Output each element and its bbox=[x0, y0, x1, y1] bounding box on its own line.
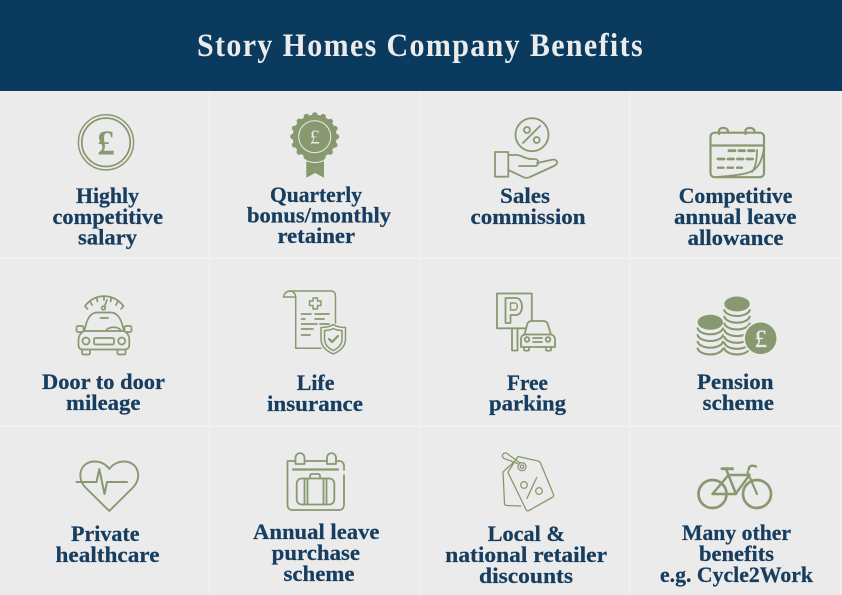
label bbox=[445, 521, 607, 588]
icon: parking sign and car bbox=[497, 294, 555, 351]
label: scheme bbox=[703, 390, 774, 415]
label bbox=[42, 369, 165, 415]
icon: calendar with suitcase bbox=[288, 453, 344, 510]
icon: heart with pulse bbox=[76, 462, 138, 511]
label bbox=[674, 183, 797, 250]
label: bonus/monthly bbox=[247, 202, 391, 228]
title: Story Homes Company Benefits bbox=[197, 28, 644, 64]
panel: door to door mileage bbox=[0, 259, 209, 426]
panel: many other benefits bbox=[630, 427, 840, 595]
label: commission bbox=[470, 204, 586, 229]
label bbox=[52, 183, 163, 250]
label: benefits bbox=[699, 541, 774, 566]
panel: annual leave purchase scheme bbox=[210, 427, 420, 595]
icon: discount tags bbox=[502, 453, 554, 511]
panel: free parking bbox=[420, 259, 630, 426]
label: salary bbox=[78, 224, 137, 250]
header banner bbox=[0, 0, 842, 91]
panel: quarterly bonus bbox=[210, 91, 420, 258]
label: Local & bbox=[488, 521, 565, 546]
icon: pound coin bbox=[78, 115, 134, 170]
label: Annual leave bbox=[253, 519, 380, 544]
label bbox=[660, 520, 814, 587]
icon: coin stacks with pound bbox=[698, 296, 778, 356]
icon: coin stacks with pound: £ bbox=[754, 326, 767, 353]
label bbox=[253, 519, 380, 586]
panel: competitive annual leave allowance bbox=[630, 91, 840, 258]
icon: bicycle bbox=[698, 466, 771, 508]
label: Quarterly bbox=[270, 182, 362, 207]
label: purchase bbox=[272, 540, 360, 565]
panel: pension scheme bbox=[630, 259, 840, 426]
label: competitive bbox=[52, 204, 163, 229]
label: Life bbox=[297, 370, 335, 395]
icon: car with gauge bbox=[76, 296, 132, 354]
icon: pound coin: £ bbox=[97, 124, 115, 162]
label: Highly bbox=[76, 183, 139, 208]
label: Sales bbox=[500, 183, 550, 208]
label: Private bbox=[71, 521, 140, 546]
label: annual leave bbox=[674, 204, 797, 229]
label: Door to door bbox=[42, 369, 165, 394]
icon: policy document with shield bbox=[284, 291, 346, 354]
label: allowance bbox=[688, 225, 784, 250]
label: Free bbox=[507, 370, 548, 395]
label: Many other bbox=[682, 520, 791, 545]
icon: hand with percent bbox=[495, 118, 557, 178]
icon: desk calendar bbox=[710, 128, 764, 177]
label: scheme bbox=[284, 561, 355, 586]
icon: rosette award bbox=[293, 115, 337, 178]
label: discounts bbox=[479, 563, 573, 588]
label: national retailer bbox=[445, 542, 607, 567]
icon: rosette award: £ bbox=[310, 126, 320, 148]
label: healthcare bbox=[56, 542, 160, 567]
panel: highly competitive salary bbox=[0, 91, 209, 258]
label bbox=[267, 370, 363, 416]
panel: private healthcare bbox=[0, 427, 209, 595]
label bbox=[697, 369, 774, 415]
label bbox=[56, 521, 160, 567]
label: parking bbox=[489, 390, 566, 416]
panel: sales commission bbox=[420, 91, 630, 258]
label: mileage bbox=[66, 390, 141, 415]
label: insurance bbox=[267, 391, 363, 416]
label bbox=[247, 182, 391, 248]
panel: retailer discounts bbox=[420, 427, 630, 595]
label: Competitive bbox=[679, 183, 793, 208]
panel: life insurance bbox=[210, 259, 420, 426]
label: Pension bbox=[697, 369, 774, 394]
label bbox=[489, 370, 566, 416]
label: retainer bbox=[278, 223, 355, 248]
label bbox=[470, 183, 586, 229]
label: e.g. Cycle2Work bbox=[660, 562, 814, 587]
